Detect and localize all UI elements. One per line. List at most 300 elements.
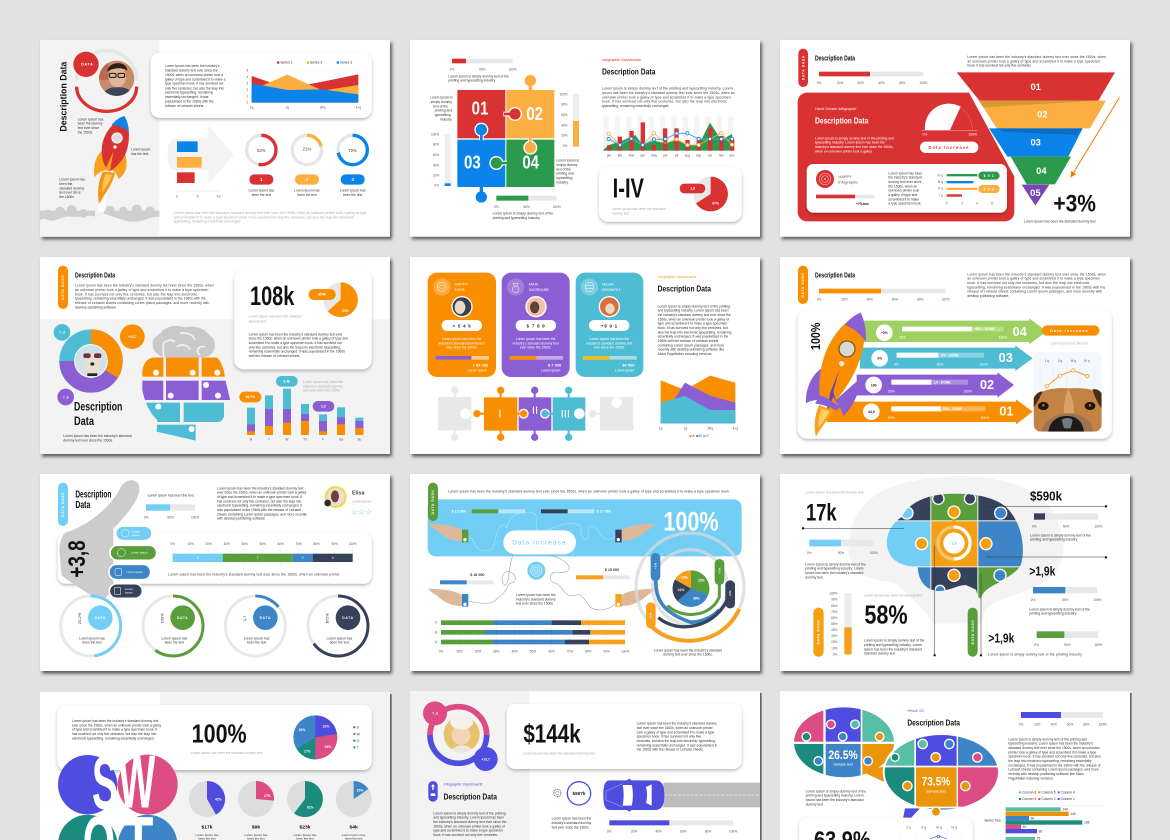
card: area chart	[151, 53, 372, 118]
stat 58%: 58%	[864, 600, 908, 630]
paragraph: book. It has survived not only five centuries.	[433, 833, 498, 837]
stat 17k: Lorem Ipsum is simply dummy text of the	[805, 562, 866, 566]
top mini bar: Lorem Ipsum has been the text.	[148, 493, 195, 497]
pie S 42%: $17k	[201, 824, 213, 830]
right paragraph: recently with desktop publishing software like	[658, 348, 724, 352]
title and progress bar: 0%	[817, 81, 821, 85]
stat 58%: 50%	[831, 622, 838, 626]
numbered pills: been the text	[252, 193, 271, 197]
title and text	[75, 272, 214, 309]
paragraph: and typesetting industry. Lorem Ipsum has been	[433, 816, 504, 820]
icon: gear and stat circle	[554, 782, 591, 805]
stat $590k: 0%	[1032, 524, 1036, 528]
numbered pills	[248, 174, 366, 197]
stacked progress bar	[168, 542, 357, 577]
inner white card: Infographic	[838, 179, 858, 184]
heading: Infographic Dashboards	[444, 783, 483, 787]
top progress bar: printing and typesetting industry.	[448, 79, 496, 83]
side tag: DATA DASH	[61, 275, 65, 300]
funnel: 02	[1037, 110, 1048, 120]
side tag	[798, 266, 808, 304]
numbered pills: 2	[306, 177, 309, 182]
rocket notes: standard dummy	[59, 186, 84, 190]
card: 108k with pie: dummy text	[249, 319, 267, 323]
big arrow with bar chart: 5	[197, 195, 199, 199]
pie legend: S	[357, 726, 360, 730]
slide background	[780, 474, 1130, 671]
heading: Description Data	[602, 67, 655, 77]
area chart	[659, 376, 738, 438]
title and progress bar: 80%	[917, 298, 924, 302]
side tag	[798, 49, 808, 87]
numbered pills: 3	[351, 177, 354, 182]
footer note: Lorem Ipsum has been the industry's standard dummy text ever since the 1500s, when an unknown printer took a galley of type	[174, 211, 367, 215]
right vertical gauge: simply dummy	[556, 163, 578, 167]
area chart: 2	[246, 88, 248, 92]
rocket notes: the 1500s.	[59, 195, 75, 199]
ring 1: 20,2%	[77, 612, 82, 624]
arrow 01: 50%	[888, 416, 895, 420]
top card: Lorem Ipsum has been the standard dummy text.	[191, 751, 263, 755]
right paragraph: standard dummy text ever since the 1500s, when an unknown	[1008, 746, 1100, 750]
top line: Lorem Ipsum has been the industry's standard dummy text ever since the 1500s, when an unknown printer took a galley of type and scrambled it to make a type specimen book.	[448, 489, 730, 493]
legend: Column 1	[1061, 797, 1075, 801]
stacked bars: A	[435, 640, 438, 644]
area chart: 3Rq	[320, 106, 326, 110]
badges around donut	[54, 324, 145, 405]
inner white card: HAPPY	[838, 174, 852, 179]
right paragraph: Letraset sheets containing Lorem Ipsum passages, and more	[1008, 768, 1099, 772]
card: happy data: ever since the 1500s.	[446, 346, 478, 350]
right paragraph: recently with desktop publishing software like Aldus	[1008, 772, 1084, 776]
data increase pill	[503, 530, 576, 554]
left note and vertical gauge: 0%	[434, 184, 439, 188]
pie W 27%: $9k	[252, 824, 260, 830]
stat 58%: 60%	[831, 616, 838, 620]
inner white card: dummy text ever since	[888, 180, 922, 184]
arrow 04: 100%	[999, 336, 1007, 340]
rocket	[806, 313, 866, 437]
hand top right	[615, 524, 655, 542]
bottom note: Lorem Ipsum has been the industry's standard	[654, 648, 722, 652]
big label: Data	[74, 414, 94, 428]
top paragraph: was popularised in the 1960s with the release of Letraset	[217, 508, 301, 512]
stacked bars: Su	[357, 438, 361, 442]
road	[663, 783, 760, 807]
left note and vertical gauge: 60%	[433, 153, 439, 157]
mini line chart	[901, 826, 962, 840]
card: maxi increase: $ 7 8 9	[527, 323, 545, 328]
pie O 61%	[287, 781, 323, 840]
right vertical gauge: 0%	[563, 144, 567, 148]
card: $144k: Lorem Ipsum has been the standard dummy text.	[523, 751, 596, 755]
stat >1,9k lower: 0%	[1034, 643, 1039, 647]
pill: sky	[116, 526, 152, 541]
right paragraph: type and scrambled it to make a type specimen	[658, 322, 727, 326]
title and progress bar	[815, 56, 928, 85]
jigsaw puzzle 01-04	[457, 75, 554, 203]
top paragraph: of type and scrambled it to make a type specimen book. It	[217, 495, 302, 499]
mini bar chart: 6	[991, 202, 993, 206]
title and progress bar: 60%	[879, 81, 885, 85]
big arrow with bar chart: 10	[217, 195, 221, 199]
heading: Result '24	[907, 709, 923, 713]
stacked bars: text ever since the 1500s.	[303, 389, 341, 393]
stacked progress bar: 0%	[170, 542, 175, 546]
card: mega growth: GROWTH	[602, 287, 620, 292]
big label: Description	[74, 400, 122, 414]
area chart: 4+q	[733, 426, 738, 430]
main card	[58, 533, 372, 584]
car	[603, 779, 664, 812]
brain	[153, 326, 215, 357]
top paragraph: has survived not only five centuries, but also the leap into	[217, 499, 302, 503]
left note: printing and typesetting industry. Lorem	[806, 794, 864, 798]
target rings and pie: 14%	[681, 576, 688, 580]
stacked progress bar: 100%	[349, 542, 357, 546]
donut 21%	[292, 135, 322, 165]
pie O 61%: 61%	[307, 805, 314, 809]
ring 4: been the text	[330, 641, 349, 645]
right paragraph: essentially unchanged. It was popularised in the	[658, 335, 728, 339]
card: area chart: standard dummy text ever since the	[165, 68, 218, 72]
slide 1: rocket and series chart	[40, 40, 390, 237]
reviewer: Lorem Ipsum	[352, 500, 372, 504]
card: happy data	[428, 273, 496, 377]
slide background	[40, 474, 390, 671]
side tag: DATA DASH	[431, 490, 435, 514]
inner white card: the industry's standard	[888, 176, 922, 180]
stat 17k: 17k	[806, 499, 837, 526]
dog photo with line chart: II q	[1058, 359, 1062, 363]
right paragraph: book. It has survived not only five centuries, but	[658, 326, 728, 330]
slide 11: $144k and car	[410, 691, 762, 840]
100% stat: 100%	[663, 506, 719, 536]
stacked bars: 1,9	[321, 404, 326, 408]
top bars: $ 12 000	[452, 509, 466, 513]
pie chart: 33%	[299, 728, 305, 732]
area chart: 5	[246, 69, 248, 73]
slide 10: SWOT	[40, 692, 392, 840]
inner white card: unknown printer took	[888, 189, 920, 193]
progress bar: 100%	[729, 829, 737, 833]
+3% stat	[1024, 191, 1097, 224]
SWOT circles	[58, 740, 178, 840]
right vertical gauge: Lorem Ipsum is	[556, 159, 579, 163]
progress bar: 20%	[1034, 723, 1041, 727]
card: happy data: DATA	[455, 287, 465, 292]
rocket notes	[59, 117, 151, 199]
title and text: an unknown printer took a galley of type and scrambled it to make a type specimen	[75, 288, 208, 292]
inner white card: a galley of type and	[888, 193, 917, 197]
left note: Ipsum has been the industry's standard	[806, 798, 864, 802]
stacked bars: 40%	[512, 650, 518, 654]
card: 63,9%	[799, 818, 973, 840]
stat 58%: 100%	[829, 592, 838, 596]
ring 1: been the text	[82, 641, 102, 645]
badges: +13,7	[481, 757, 490, 761]
stat 17k: printing and typesetting industry. Lorem	[805, 567, 864, 571]
ring 4	[308, 596, 368, 656]
stat 17k: 50%	[838, 551, 844, 555]
data increase pill: Lorem Ipsum has the text.	[1050, 342, 1089, 346]
right paragraph: Lorem Ipsum is simply dummy text of the printing and	[1008, 737, 1087, 741]
right speech bubble: Sample text	[926, 789, 946, 793]
hand bottom right	[615, 589, 655, 607]
stat 17k: Ipsum has been the industry's standard	[805, 571, 863, 575]
arrow 03: 0%	[894, 362, 899, 366]
right paragraph	[1008, 737, 1101, 780]
pill: sky: Lorem	[132, 529, 141, 533]
numbered pills: Lorem Ipsum has	[248, 189, 275, 193]
stacked progress bar: 80%	[313, 542, 320, 546]
slide shadow edge	[390, 694, 392, 840]
bottom progress bar: 0%	[494, 205, 499, 209]
right speech bubble: 73.5%	[922, 775, 951, 789]
stat >1,9k lower	[968, 574, 1103, 657]
stat $590k: $590k	[1030, 488, 1063, 503]
pill: sky: Ipsum	[132, 533, 140, 537]
left note and vertical gauge: 100%	[431, 132, 439, 136]
stat $590k: 50%	[1063, 524, 1069, 528]
side tag	[58, 266, 68, 309]
title and text: release of Letraset sheets containing Lorem Ipsum passages, and more recently with	[75, 301, 209, 305]
SWOT circles: S	[92, 741, 118, 825]
numbered pills: been the text	[343, 193, 362, 197]
paragraph: unknown printer took a galley of type and scrambled it to make a type specimen	[602, 95, 731, 99]
card: happy data: HAPPY	[455, 282, 469, 287]
pill: navy: Lorem	[125, 587, 134, 591]
stacked bars: W	[286, 438, 289, 442]
target rings and pie: +1%	[649, 613, 653, 619]
pie S 42%: Lorem Ipsum has	[195, 833, 219, 837]
area chart: 2q	[684, 426, 687, 430]
slide background	[410, 474, 760, 671]
stacked bars: industry's standard dummy	[303, 384, 343, 388]
right vertical gauge: 20%	[561, 134, 568, 138]
card: I-IV with pie: dummy text	[612, 211, 630, 215]
ring 3: DATA	[260, 616, 271, 620]
left note and vertical gauge: simply dummy	[431, 100, 452, 104]
area chart: Series 2	[310, 60, 322, 64]
stat 17k: dummy text.	[805, 575, 824, 579]
combo chart: jun	[662, 154, 668, 158]
card: maxi increase: $ 7 000	[548, 363, 562, 368]
top paragraph: an unknown printer took a galley of type and scrambled it to make a type specimen	[967, 277, 1100, 281]
footer note	[174, 211, 367, 224]
heading	[444, 783, 497, 802]
pie T 15%: 15%	[357, 789, 363, 793]
stat 58%	[813, 545, 936, 657]
big label	[63, 400, 132, 442]
numbered pills: been the text	[297, 193, 317, 197]
horizontal bars: 140	[1062, 808, 1068, 812]
funnel: 04	[1036, 166, 1047, 176]
card: $144k: the 1960s with the release of Letraset sheets.	[637, 748, 704, 752]
area chart: 4	[246, 75, 248, 79]
top mini bar: 100%	[191, 515, 199, 519]
area chart: 2q	[286, 106, 289, 110]
stacked progress bar: Lorem Ipsum has been the industry's standard dummy text ever since the 1500s, when an unknown printer.	[168, 573, 340, 577]
paragraph	[433, 811, 507, 837]
brain puzzle	[883, 492, 1025, 601]
stat 58%: 0%	[833, 652, 837, 656]
ring 2: been the text	[165, 641, 184, 645]
rocket notes: Lorem Ipsum has	[78, 117, 104, 121]
stat 58%: Lorem Ipsum is simply dummy text of the	[864, 639, 925, 643]
card: area chart: Lorem Ipsum has been the industry's	[165, 64, 220, 68]
arrow 04	[863, 318, 1047, 344]
title and progress bar: 0%	[817, 298, 821, 302]
left note and vertical gauge: 20%	[433, 174, 439, 178]
card: 108k with pie: scrambled it to make a type specimen book. It has survived not	[249, 341, 342, 345]
card: 108k with pie: Lorem Ipsum has been the industry's standard dummy text ever	[249, 332, 343, 336]
card: maxi increase: industry's standard dummy text	[513, 341, 559, 345]
mini bar chart: $ 8 9	[984, 187, 994, 191]
target rings and pie: +1%	[728, 590, 732, 597]
heading: Infographic Dashboards	[602, 58, 641, 62]
slide shadow edge	[1130, 693, 1132, 840]
title and progress bar: 20%	[841, 298, 848, 302]
legend: Column 2	[1041, 797, 1056, 801]
right vertical gauge: text of the	[556, 167, 571, 171]
side tag	[428, 483, 438, 521]
combo chart	[603, 117, 735, 158]
donut 72%	[338, 135, 367, 165]
left note and vertical gauge: printing and	[435, 109, 452, 113]
icon: gear and stat circle: $907k	[573, 791, 586, 796]
pill: blue	[109, 564, 151, 580]
card: maxi increase: MAXI	[529, 282, 538, 287]
jigsaw puzzle 01-04: 03	[464, 152, 481, 173]
panel text: Hand Chosen Infographic	[815, 107, 857, 111]
card: $144k: centuries, but also the leap into electronic typesetting,	[637, 739, 716, 743]
donut 53%	[247, 135, 276, 165]
jigsaw puzzle 01-04: 01	[472, 97, 488, 118]
numbered pills: Lorem Ipsum has	[340, 189, 366, 193]
portrait photo	[98, 60, 135, 97]
target rings and pie: 21%	[678, 588, 684, 592]
note: Lorem Ipsum has been the	[552, 817, 591, 821]
left note and vertical gauge: Lorem Ipsum is	[430, 96, 453, 100]
slide background	[40, 40, 390, 237]
right vertical gauge: 40%	[561, 123, 568, 127]
top paragraph: Lorem Ipsum has been the industry's standard dummy text ever since the 1500s, when	[967, 55, 1106, 59]
ring 1	[61, 596, 121, 656]
rocket notes: text ever since	[59, 191, 81, 195]
bottom progress bar: printing and typesetting industry.	[493, 216, 540, 220]
top paragraph	[967, 272, 1106, 298]
right speech bubble	[882, 735, 998, 818]
ring 3: been the text	[247, 641, 266, 645]
top progress bar: Lorem Ipsum is simply dummy text of the	[448, 74, 509, 78]
gauge: 0%	[923, 133, 927, 137]
note: text ever since the 1500s.	[552, 825, 590, 829]
stacked progress bar: 30%	[224, 542, 230, 546]
area chart: C	[706, 434, 709, 438]
red panel	[798, 93, 1014, 221]
progress bar: 80%	[705, 829, 711, 833]
reviewer	[324, 486, 372, 517]
pie O 61%: $23k	[299, 824, 311, 830]
stat 58%: DATA DASH	[817, 620, 821, 644]
ring 4: DATA	[342, 616, 354, 620]
right paragraph: PageMaker including versions.	[1008, 776, 1054, 780]
mini bar chart: $ 9 1	[984, 174, 994, 178]
stat $590k: 100%	[1094, 524, 1103, 528]
right paragraph: Lorem Ipsum is simply dummy text of the printing	[658, 304, 730, 308]
pie chart: 22%	[323, 725, 329, 729]
title and text: typesetting, remaining essentially unchanged. It was popularised in the 1960s with the	[75, 297, 206, 301]
arrow 02: 100%	[963, 389, 972, 393]
stat 17k	[802, 491, 904, 579]
reviewer: Elisa	[352, 491, 364, 497]
reviewer: ☆☆☆	[351, 508, 372, 517]
stat >1,9k upper	[986, 556, 1107, 616]
note	[552, 817, 592, 829]
numbered pills: 1	[260, 177, 263, 182]
badges: ? ,3	[432, 712, 438, 716]
target rings and pie: 29%	[698, 579, 705, 583]
title: Data	[75, 500, 91, 511]
right paragraph	[658, 304, 732, 356]
pie O 61%: Lorem Ipsum has	[293, 833, 317, 837]
side tag: DATA DASH	[801, 55, 805, 80]
top card: 100%	[192, 719, 247, 749]
stat >1,9k upper: 50%	[1062, 598, 1069, 602]
stat 58%: Ipsum has been the industry's standard	[864, 647, 922, 651]
area chart	[246, 60, 361, 110]
stat >1,9k upper: 0%	[1031, 598, 1035, 602]
right paragraph: Aldus PageMaker including versions.	[658, 352, 712, 356]
puzzle chain I II III	[438, 386, 633, 441]
arrow 04: +2%	[881, 331, 888, 335]
gauge: Data Increase	[928, 145, 970, 150]
side tag: DATA DASH	[801, 273, 805, 297]
pie W 27%: Lorem Ipsum has	[244, 833, 268, 837]
top progress bar: 0%	[450, 68, 454, 72]
funnel	[957, 72, 1115, 206]
stacked bars: 5,4k	[283, 379, 290, 383]
pie S 42%	[189, 781, 225, 840]
arrow 03: 50%	[937, 362, 943, 366]
side tag	[58, 483, 68, 526]
stacked progress bar: 7	[257, 556, 259, 560]
left speech bubble: 26.5%	[828, 748, 858, 762]
stacked progress bar: 60%	[278, 542, 284, 546]
title and progress bar: 20%	[837, 81, 843, 85]
card: 108k with pie: remaining essentially unchanged. It was popularised in the 1960s	[249, 350, 345, 354]
progress bar: 0%	[1019, 723, 1023, 727]
arrow 03: 3%	[877, 357, 882, 361]
stat 58%: 20%	[831, 640, 838, 644]
stacked bars: 30%	[493, 650, 500, 654]
stacked bars	[435, 617, 629, 654]
stat 17k: Lorem Ipsum has been the dummy text.	[806, 491, 864, 495]
stacked progress bar: 20%	[206, 542, 212, 546]
right paragraph: printer took a galley of type and scrambled it to make a type	[1008, 750, 1097, 754]
title and text: Lorem Ipsum has been the industry's standard dummy text ever since the 1500s, when	[75, 284, 214, 288]
slide 3: funnel	[780, 40, 1130, 237]
top progress bar: 50%	[479, 68, 486, 72]
stat 58%: standard dummy text.	[864, 652, 896, 656]
paragraph: Lorem Ipsum is simply dummy text of the printing	[433, 811, 506, 815]
card: maxi increase: Lorem Ipsum has been the	[516, 337, 556, 341]
card: 108k with pie: with the release of Letraset sheets.	[249, 354, 300, 358]
arrow 02: 50%	[888, 389, 895, 393]
title and progress bar: 80%	[899, 81, 906, 85]
combo chart: may	[651, 154, 657, 158]
